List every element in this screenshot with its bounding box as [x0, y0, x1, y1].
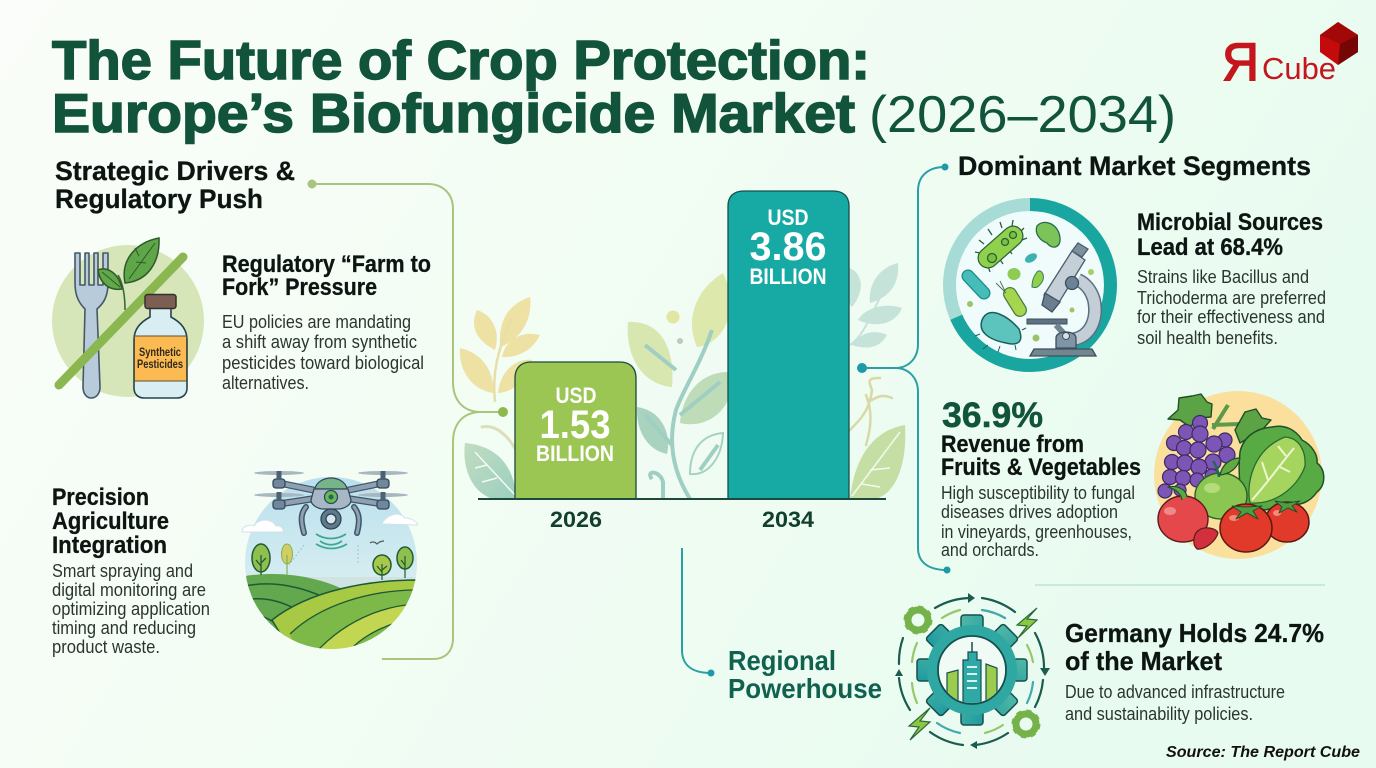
- text block: fruits and vegetables: diseases drives adoption: [941, 501, 1118, 522]
- text block: fruits and vegetables: [941, 396, 1141, 560]
- text block: fruits and vegetables: High susceptibility to fungal: [941, 482, 1135, 503]
- text block: precision agriculture: Agriculture: [52, 508, 169, 535]
- text block: regulatory farm to fork: pesticides toward biological: [222, 352, 424, 373]
- text block: precision agriculture: digital monitoring are: [52, 579, 206, 600]
- text block: microbial sources: for their effectiveness and: [1137, 306, 1325, 327]
- title: [52, 29, 1176, 144]
- text block: fruits and vegetables: Revenue from: [941, 431, 1084, 458]
- text block: fruits and vegetables: 36.9%: [942, 396, 1043, 435]
- text block: germany: and sustainability policies.: [1065, 703, 1253, 724]
- text block: precision agriculture: optimizing application: [52, 598, 210, 619]
- text block: microbial sources: soil health benefits.: [1137, 327, 1278, 348]
- logo: RCube: [1222, 22, 1358, 92]
- text block: microbial sources: [1137, 209, 1326, 348]
- text block: microbial sources: Lead at 68.4%: [1137, 234, 1283, 261]
- text block: microbial sources: Microbial Sources: [1137, 209, 1323, 236]
- text block: germany: [1065, 618, 1324, 724]
- text block: fruits and vegetables: in vineyards, greenhouses,: [941, 521, 1132, 542]
- baseline axis: [478, 498, 886, 500]
- text block: germany: of the Market: [1065, 646, 1222, 676]
- connector: regional powerhouse: [682, 548, 714, 676]
- text block: germany: Germany Holds 24.7%: [1065, 618, 1324, 648]
- bar: 2026: USD: [556, 383, 596, 408]
- text block: precision agriculture: [52, 484, 210, 657]
- label: 2034: 2034: [762, 507, 815, 532]
- connector: left drivers to 2026 bar: [308, 180, 508, 659]
- bar: 2034: USD: [768, 205, 808, 230]
- icon: fork, leaves and pesticide bottle: [52, 238, 204, 398]
- text block: precision agriculture: product waste.: [52, 636, 160, 657]
- bar: 2034: 3.86: [750, 225, 826, 269]
- title: (2026–2034): [869, 86, 1176, 144]
- text block: precision agriculture: Smart spraying and: [52, 560, 193, 581]
- text block: microbial sources: Trichoderma are preferred: [1137, 287, 1326, 308]
- bar: 2026: [515, 362, 636, 499]
- text block: regional powerhouse heading: [728, 645, 882, 704]
- icon: gear with city: [895, 593, 1050, 749]
- text block: regulatory farm to fork: Regulatory “Farm to: [222, 251, 431, 278]
- icon: microbes and microscope: [950, 204, 1110, 366]
- label: 2026: 2026: [550, 507, 602, 532]
- panel heading: strategic drivers: Strategic Drivers &: [55, 156, 295, 186]
- bar: 2026: BILLION: [536, 441, 614, 466]
- panel heading: strategic drivers: Regulatory Push: [55, 184, 263, 214]
- text block: regulatory farm to fork: a shift away from synthetic: [222, 331, 417, 352]
- panel heading: dominant market segments: Dominant Market Segments: [958, 151, 1311, 181]
- icon: fork, leaves and pesticide bottle: Synthetic: [139, 347, 181, 359]
- text block: regional powerhouse heading: Regional: [728, 645, 836, 676]
- text block: regulatory farm to fork: Fork” Pressure: [222, 274, 377, 301]
- bar: 2034: [728, 191, 849, 499]
- text block: regulatory farm to fork: [222, 251, 431, 393]
- text block: regulatory farm to fork: EU policies are mandating: [222, 311, 411, 332]
- source note: Source: The Report Cube: [1166, 744, 1360, 761]
- icon: fork, leaves and pesticide bottle: Pesticides: [137, 359, 183, 371]
- title: Europe’s Biofungicide Market: [52, 82, 855, 144]
- text block: microbial sources: Strains like Bacillus and: [1137, 266, 1309, 287]
- text block: fruits and vegetables: and orchards.: [941, 539, 1039, 560]
- text block: germany: Due to advanced infrastructure: [1065, 681, 1285, 702]
- text block: precision agriculture: Precision: [52, 484, 149, 511]
- text block: regional powerhouse heading: Powerhouse: [728, 673, 882, 704]
- bar: 2026: 1.53: [540, 403, 610, 447]
- title: The Future of Crop Protection:: [52, 29, 870, 91]
- text block: precision agriculture: Integration: [52, 532, 167, 559]
- logo: RCube: Cube: [1262, 51, 1336, 86]
- text block: regulatory farm to fork: alternatives.: [222, 372, 309, 393]
- icon: fruits and vegetables: [1154, 391, 1324, 559]
- logo: RCube: Я: [1222, 33, 1259, 92]
- text block: fruits and vegetables: Fruits & Vegetables: [941, 454, 1141, 481]
- decorative plants behind chart: [460, 263, 905, 499]
- bar: 2034: BILLION: [750, 264, 826, 289]
- connector: right segments from 2034 bar: [857, 164, 950, 574]
- bar chart: market size: [478, 191, 886, 532]
- text block: precision agriculture: timing and reducing: [52, 617, 196, 638]
- panel heading: strategic drivers: [55, 156, 295, 214]
- icon: drone over fields: [242, 471, 418, 650]
